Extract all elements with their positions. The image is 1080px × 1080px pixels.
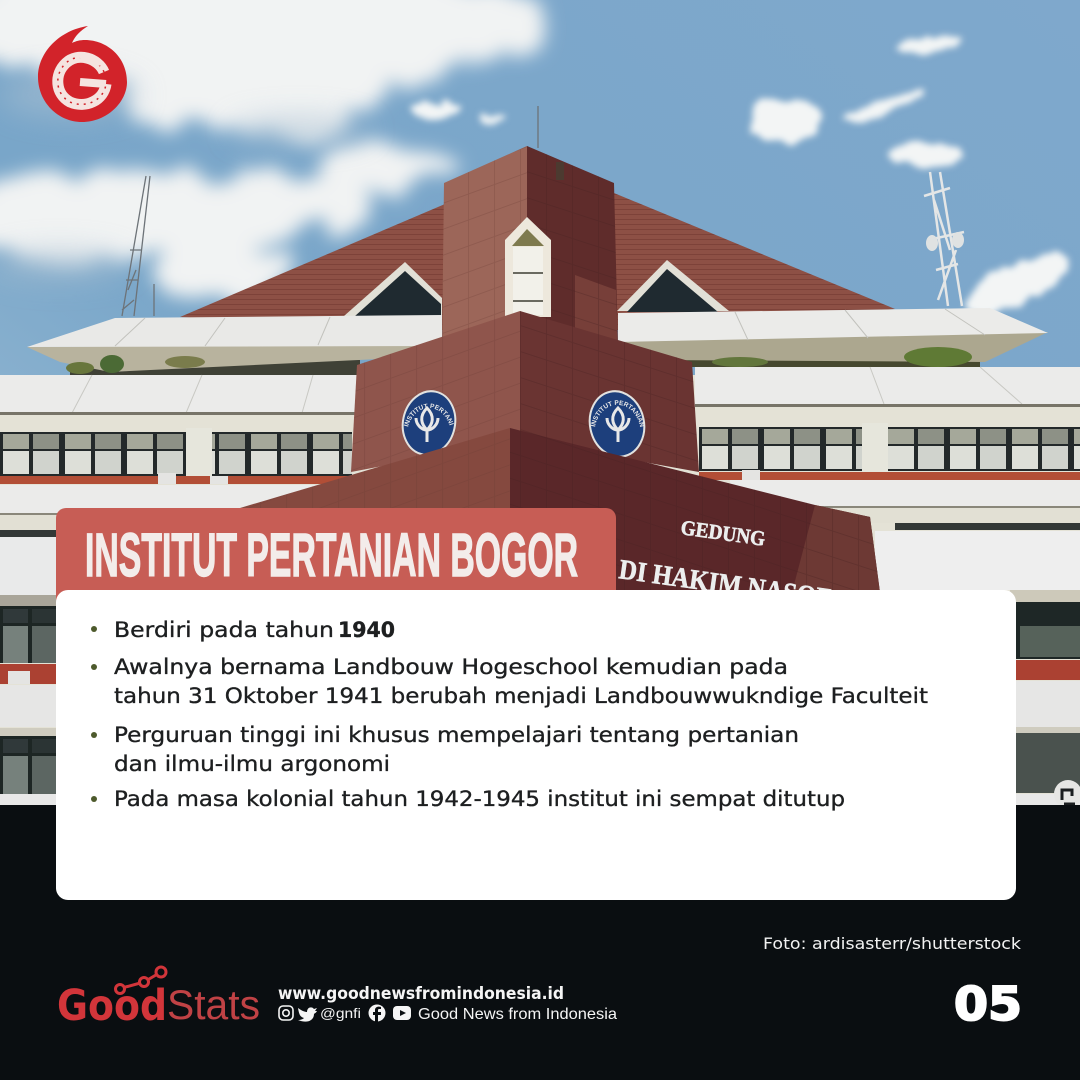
middle block [351, 311, 699, 472]
background photo: building under a cloudy sky [0, 0, 1080, 805]
logo: red six with white G emblem [38, 26, 127, 122]
GoodStats logo: Stats [167, 981, 260, 1028]
building sign [618, 521, 832, 590]
university emblems [402, 390, 646, 457]
bullet 3: dan ilmu-ilmu argonomi [114, 752, 390, 777]
chart line icon [116, 967, 166, 994]
bullet 3: Perguruan tinggi ini khusus mempelajari tentang pertanian [114, 723, 799, 748]
icon: youtube [393, 1006, 411, 1020]
icon: instagram [279, 1006, 293, 1020]
tower [442, 146, 618, 345]
icon: facebook [368, 1004, 386, 1022]
GoodStats logo [57, 967, 260, 1031]
photo credit: Foto: ardisasterr/shutterstock [763, 934, 1022, 953]
university emblems: INSTITUT PERTANIAN [590, 400, 644, 427]
website and social handles: www.goodnewsfromindonesia.id [278, 984, 564, 1003]
GoodStats logo: Good [57, 981, 167, 1031]
left wing floors [0, 375, 357, 806]
right wing floors [695, 367, 1080, 808]
bullet 1: Berdiri pada tahun [114, 618, 334, 643]
page number: 05 [954, 977, 1022, 1031]
bullet 4: Pada masa kolonial tahun 1942-1945 institut ini sempat ditutup [114, 787, 845, 812]
building sign: GEDUNG [679, 515, 767, 551]
website and social handles [278, 984, 617, 1023]
website and social handles: @gnfi [320, 1005, 361, 1021]
antennas [122, 106, 964, 316]
sky [0, 0, 1080, 810]
icon: twitter [298, 1007, 317, 1022]
clouds [0, 0, 1077, 326]
title text: INSTITUT PERTANIAN BOGOR [85, 521, 578, 589]
bullet 3 [91, 723, 799, 777]
bullet 1 [91, 618, 395, 643]
content card [56, 590, 1016, 900]
bullet list [91, 618, 928, 812]
title tab [56, 508, 616, 600]
university emblems: INSTITUT PERTANIAN [404, 404, 454, 427]
building backing [0, 375, 1080, 805]
bullet 2: tahun 31 Oktober 1941 berubah menjadi Landbouwwukndige Faculteit [114, 684, 928, 709]
roof [180, 193, 895, 330]
bullet 2: Awalnya bernama Landbouw Hogeschool kemudian pada [114, 655, 788, 680]
website and social handles: Good News from Indonesia [418, 1006, 617, 1023]
upper roof slab right [618, 308, 1048, 367]
footer dark band [0, 805, 1080, 1080]
bullet 2 [91, 655, 928, 709]
roof dormers [344, 260, 729, 316]
bullet 1: 1940 [338, 618, 395, 643]
lower block [240, 428, 881, 600]
building sign: DI HAKIM NASOE [617, 554, 834, 615]
upper roof slab left [27, 315, 442, 375]
